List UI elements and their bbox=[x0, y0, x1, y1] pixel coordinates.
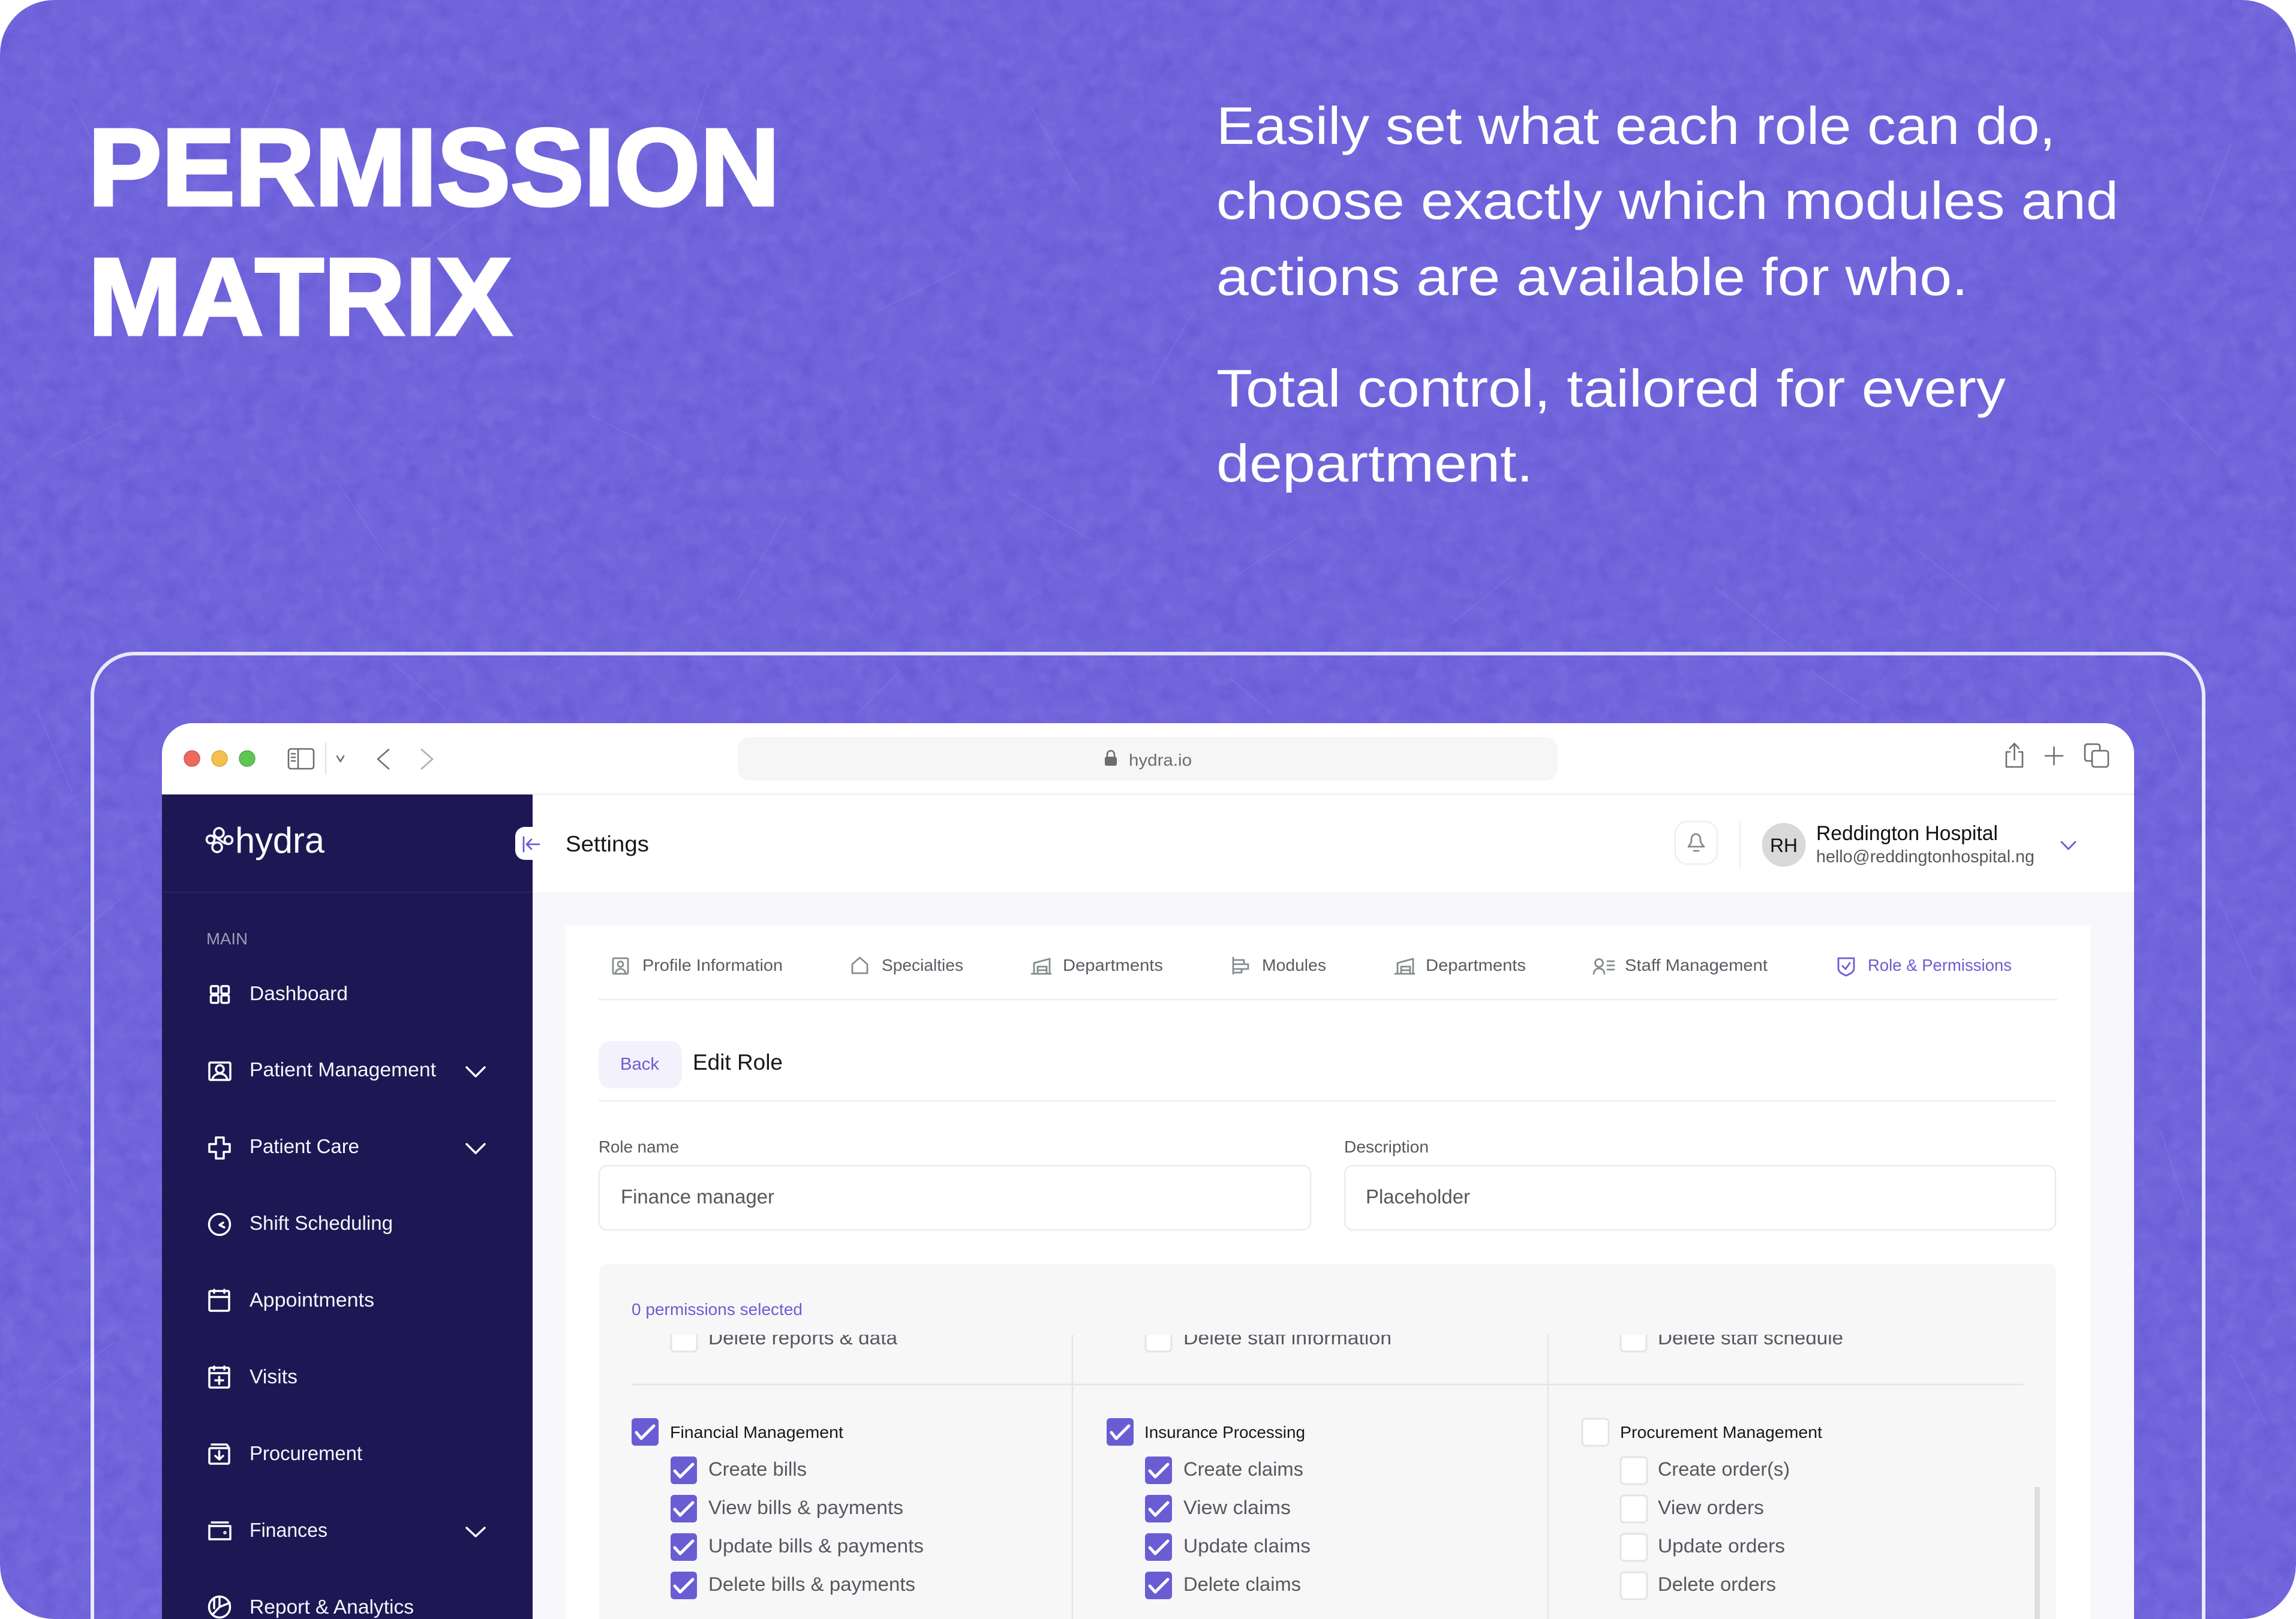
page heading: Settings: Settings bbox=[566, 832, 649, 856]
icon: sidebar toggle bbox=[288, 749, 314, 769]
scrolled row: delete permissions: Delete reports & data bbox=[708, 1327, 897, 1349]
panel: sidebar bbox=[162, 795, 533, 1619]
tab: Departments (second): Departments bbox=[1426, 956, 1526, 974]
icon: new tab plus bbox=[2045, 747, 2063, 765]
group checkbox: Financial Management: Financial Management bbox=[670, 1423, 843, 1442]
intro text: Easily set what each role can do, bbox=[1216, 96, 2055, 155]
icon: lock bbox=[1105, 751, 1117, 766]
item: Delete claims: Delete claims bbox=[1183, 1573, 1301, 1595]
field: role name: Finance manager bbox=[621, 1185, 774, 1208]
scrollbar bbox=[2034, 1487, 2040, 1619]
panel: permissions bbox=[599, 1264, 2056, 1619]
nav item: Patient Care bbox=[209, 1135, 485, 1158]
item: Delete bills & payments: Delete bills & payments bbox=[708, 1573, 915, 1595]
item: Create order(s): Create order(s) bbox=[1658, 1458, 1790, 1480]
tab: Specialties: Specialties bbox=[882, 956, 963, 974]
user avatar: RH bbox=[1770, 835, 1798, 856]
url text: hydra.io bbox=[1129, 751, 1192, 769]
group checkbox: Procurement Management: Procurement Management bbox=[1620, 1423, 1822, 1442]
field: role name: Role name bbox=[599, 1137, 679, 1156]
notification button bbox=[1675, 821, 1717, 864]
icon: share bbox=[2006, 744, 2022, 767]
title bbox=[88, 106, 780, 358]
nav item: Report & Analytics: Report & Analytics bbox=[250, 1596, 414, 1618]
window traffic lights bbox=[184, 751, 255, 766]
panel: content background bbox=[533, 892, 2134, 1619]
nav item: Patient Management bbox=[209, 1058, 485, 1081]
hydra logo: hydra bbox=[235, 820, 325, 860]
item: Update claims bbox=[1145, 1533, 1311, 1561]
tab: Departments: Departments bbox=[1063, 956, 1163, 974]
nav item: Dashboard: Dashboard bbox=[250, 982, 348, 1004]
group checkbox: Insurance Processing: Insurance Processing bbox=[1144, 1423, 1305, 1442]
item: Create bills: Create bills bbox=[708, 1458, 807, 1480]
field: role name bbox=[599, 1137, 1311, 1230]
tab: Modules: Modules bbox=[1262, 956, 1326, 974]
user avatar bbox=[1762, 823, 1805, 867]
intro text: choose exactly which modules and bbox=[1216, 171, 2118, 230]
item: View bills & payments bbox=[671, 1495, 903, 1522]
user details: Reddington Hospital bbox=[1816, 822, 1998, 845]
scrolled row: delete permissions: Delete staff information bbox=[1183, 1327, 1392, 1349]
column: Financial Management bbox=[632, 1418, 924, 1599]
panel: settings card bbox=[566, 926, 2090, 1619]
item: View orders: View orders bbox=[1658, 1497, 1764, 1518]
intro text: actions are available for who. bbox=[1216, 247, 1968, 306]
item: Update bills & payments bbox=[671, 1533, 924, 1561]
scrolled row: delete permissions: Delete staff schedule bbox=[1658, 1327, 1843, 1349]
intro text bbox=[1216, 96, 2118, 493]
item: Create claims bbox=[1145, 1457, 1303, 1484]
icon: back arrow bbox=[378, 750, 389, 769]
section label: MAIN: MAIN bbox=[206, 929, 248, 948]
tab: Modules bbox=[1233, 956, 1326, 974]
selection count: 0 permissions selected bbox=[632, 1300, 803, 1319]
nav item: Appointments: Appointments bbox=[250, 1289, 374, 1311]
group checkbox: Financial Management bbox=[632, 1418, 843, 1446]
item: Create claims: Create claims bbox=[1183, 1458, 1303, 1480]
matrix grid lines bbox=[632, 1335, 2023, 1619]
intro text: Total control, tailored for every bbox=[1216, 359, 2006, 418]
nav item: Procurement: Procurement bbox=[250, 1442, 362, 1464]
user details: hello@reddingtonhospital.ng bbox=[1816, 847, 2034, 866]
group checkbox: Insurance Processing bbox=[1107, 1418, 1305, 1446]
tab: Role & Permissions (active): Role & Permissions bbox=[1868, 956, 2012, 974]
item: View orders bbox=[1621, 1495, 1764, 1522]
tab: Staff Management: Staff Management bbox=[1625, 956, 1768, 974]
browser window bbox=[162, 723, 2134, 1619]
item: Create order(s) bbox=[1621, 1457, 1790, 1484]
item: Delete orders bbox=[1621, 1572, 1776, 1599]
nav item: Visits: Visits bbox=[250, 1365, 297, 1388]
group checkbox: Procurement Management bbox=[1582, 1419, 1822, 1446]
item: Create bills bbox=[671, 1457, 807, 1484]
item: Update orders bbox=[1621, 1534, 1785, 1561]
item: Delete claims bbox=[1145, 1572, 1301, 1599]
item: Update bills & payments: Update bills & payments bbox=[708, 1535, 924, 1557]
field: description: Placeholder bbox=[1366, 1185, 1470, 1208]
nav item: Patient Care: Patient Care bbox=[250, 1135, 359, 1157]
item: Update claims: Update claims bbox=[1183, 1535, 1311, 1557]
white frame outline bbox=[92, 654, 2204, 1619]
nav item: Shift Scheduling: Shift Scheduling bbox=[250, 1212, 393, 1234]
browser toolbar bbox=[162, 737, 2134, 794]
panel: app header bbox=[515, 821, 2075, 868]
tab: Profile Information: Profile Information bbox=[642, 956, 783, 974]
item: Delete bills & payments bbox=[671, 1572, 915, 1599]
column: Insurance Processing bbox=[1107, 1418, 1311, 1599]
title: PERMISSION bbox=[88, 106, 780, 228]
item: Delete orders: Delete orders bbox=[1658, 1573, 1776, 1595]
field: description bbox=[1344, 1137, 2055, 1230]
title: MATRIX bbox=[88, 235, 512, 358]
item: View bills & payments: View bills & payments bbox=[708, 1497, 903, 1518]
sidebar collapse button bbox=[515, 827, 546, 860]
column: Procurement Management bbox=[1582, 1419, 1822, 1599]
field: description: Description bbox=[1344, 1137, 1429, 1156]
nav item: Patient Management: Patient Management bbox=[250, 1058, 436, 1081]
account chevron bbox=[2061, 842, 2075, 849]
heading: Edit Role: Edit Role bbox=[693, 1050, 783, 1075]
tab bar bbox=[613, 956, 2012, 976]
nav item: Finances: Finances bbox=[250, 1519, 327, 1541]
scrolled row: delete permissions bbox=[671, 1319, 1843, 1352]
back button bbox=[599, 1041, 682, 1088]
item: Update orders: Update orders bbox=[1658, 1535, 1785, 1557]
item: View claims: View claims bbox=[1183, 1497, 1291, 1518]
icon: forward arrow bbox=[422, 750, 432, 769]
intro text: department. bbox=[1216, 434, 1533, 493]
nav item: Finances bbox=[209, 1519, 485, 1541]
nav item: Visits bbox=[209, 1365, 297, 1388]
icon: tab chevron and divider bbox=[326, 742, 344, 775]
icon: tab overview bbox=[2085, 744, 2108, 767]
user details bbox=[1816, 822, 2034, 866]
address bar bbox=[738, 737, 1558, 781]
item: View claims bbox=[1145, 1495, 1291, 1522]
back button: Back bbox=[620, 1055, 659, 1074]
